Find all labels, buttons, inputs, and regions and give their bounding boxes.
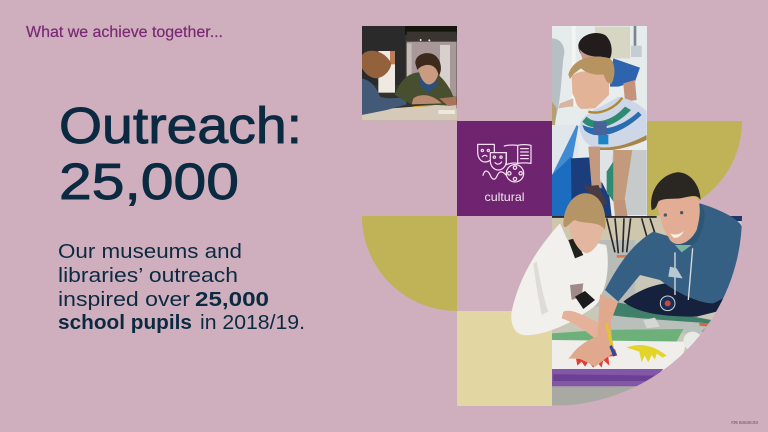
body text: in 2018/19. [200,311,305,334]
body text: Our museums and [58,240,242,263]
photo: boy in Egyptian costume [552,26,647,217]
cream square [457,311,552,406]
olive quarter circle lower left [362,216,457,311]
man's forearm and hand over the paper [569,294,618,367]
label: cultural: cultural [484,190,524,204]
purple cultural tile [457,121,552,216]
body text: libraries’ outreach [58,264,238,287]
body text: school pupils [58,311,192,334]
photo: man and child painting handprints [511,172,752,416]
olive quarter circle top right [647,121,742,216]
body text: inspired over [58,288,190,311]
icon: masks, book and film reel [478,144,531,182]
yellow handprint [627,345,667,362]
body text: 25,000 [195,288,269,311]
main title: 25,000 [59,153,239,210]
main title [59,97,302,210]
body text [58,240,305,334]
red handprint [568,349,617,368]
main title: Outreach: [59,97,302,154]
child in white overall [511,193,611,340]
man in blue hoodie [605,172,743,317]
photo: two children at a museum table [362,25,457,121]
kicker heading: What we achieve together... [26,24,223,41]
